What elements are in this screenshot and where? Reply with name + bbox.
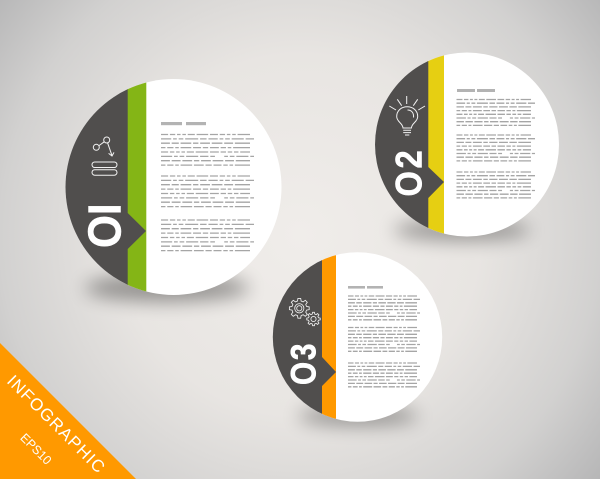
text block: step 03 [348,296,420,387]
number 03: O3 [284,342,323,385]
yellow band [427,55,444,234]
heading placeholder [348,286,383,289]
dark segment with arrow [272,260,336,414]
number 01: OI [80,203,131,248]
shadow: step 03 [298,406,418,426]
circle: step 02 [375,52,559,236]
banner subtitle: EPS10 [17,431,54,468]
heading placeholder [457,89,495,92]
banner triangle [0,343,136,479]
orange band [321,255,336,419]
panel: step 01 [60,70,282,302]
dark segment with arrow [375,61,444,228]
icon: gears [289,298,320,326]
green band [127,70,146,300]
circle: step 01 [66,79,282,295]
icon: network and bars [92,137,117,175]
number 02: O2 [389,148,430,196]
corner banner [0,343,136,479]
panel: step 03 [265,245,442,435]
text block: step 01 [161,134,254,251]
heading placeholder [161,122,206,125]
text block: step 02 [456,100,535,198]
icon: light bulb [389,96,425,135]
shadow: step 02 [394,219,530,241]
circle: step 03 [273,252,442,422]
dark segment with arrow [66,89,146,285]
panel: step 02 [370,45,559,245]
banner title: INFOGRAPHIC [3,371,109,477]
shadow: step 01 [85,274,249,302]
